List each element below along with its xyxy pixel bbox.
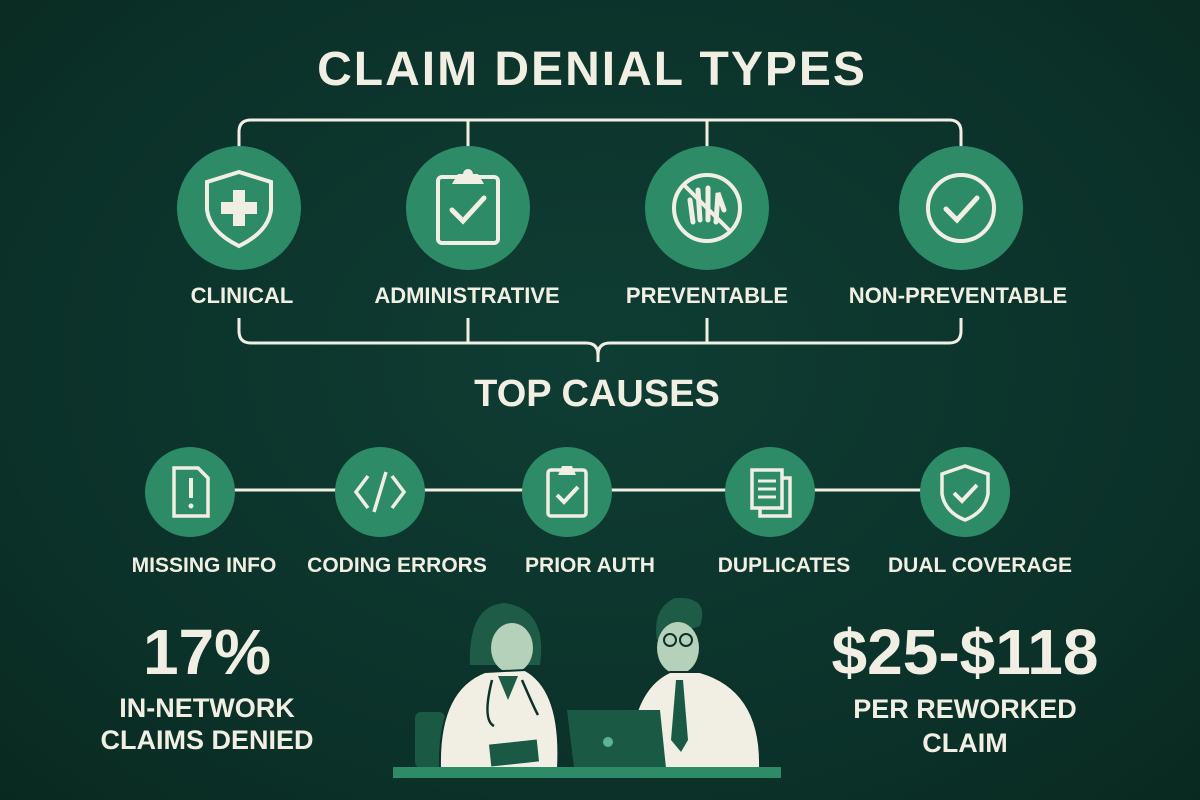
stat: 17%: 17% — [143, 616, 271, 688]
illustration: doctor and colleague at desk — [393, 598, 781, 778]
causes connector line — [190, 488, 965, 492]
label: coding errors: CODING ERRORS — [307, 554, 487, 577]
label: dual coverage: DUAL COVERAGE — [888, 554, 1072, 577]
label: prior auth: PRIOR AUTH — [525, 554, 655, 577]
icon: duplicates — [725, 447, 815, 537]
stat: cost per reworked claim — [832, 616, 1098, 758]
stat: 17% — [100, 616, 314, 755]
label: missing info: MISSING INFO — [132, 554, 276, 577]
icon: clinical shield — [177, 146, 301, 270]
label: non-preventable: NON-PREVENTABLE — [849, 283, 1067, 308]
icon: dual coverage — [920, 447, 1010, 537]
stat: 17%: CLAIMS DENIED — [100, 725, 314, 755]
heading: top causes: TOP CAUSES — [474, 373, 720, 415]
icon: preventable hand — [645, 146, 769, 270]
label: administrative: ADMINISTRATIVE — [374, 283, 560, 308]
label: clinical: CLINICAL — [191, 283, 293, 308]
icon: non-preventable check — [899, 146, 1023, 270]
title: CLAIM DENIAL TYPES — [317, 43, 867, 96]
icon: prior auth — [522, 447, 612, 537]
stat: cost per reworked claim: CLAIM — [922, 728, 1008, 758]
label: preventable: PREVENTABLE — [626, 283, 788, 308]
icon: administrative clipboard — [406, 146, 530, 270]
bracket: bottom connector — [239, 318, 961, 362]
icon: coding errors — [335, 447, 425, 537]
stat: cost per reworked claim: $25-$118 — [832, 616, 1098, 688]
label: duplicates: DUPLICATES — [718, 554, 850, 577]
stat: cost per reworked claim: PER REWORKED — [853, 694, 1077, 724]
icon: missing info — [145, 447, 235, 537]
bracket: top connector — [239, 120, 961, 147]
stat: 17%: IN-NETWORK — [119, 693, 295, 723]
